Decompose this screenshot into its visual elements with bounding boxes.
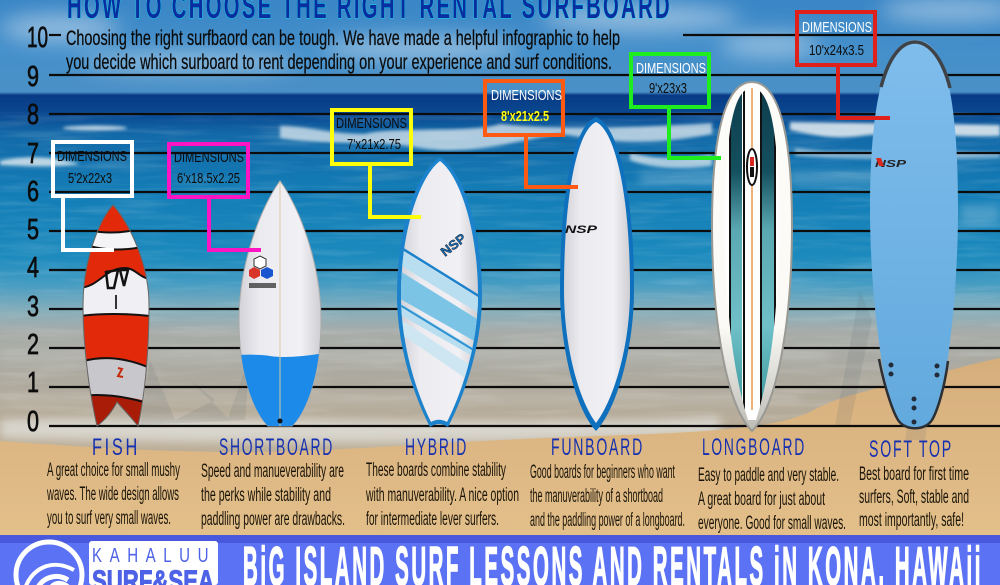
panel: hybrid description: These boards combine stability [366,460,506,481]
panel: hybrid description: with manuverability. A nice option [365,485,519,506]
panel: longboard description [698,434,846,534]
board: longboard [712,82,792,431]
callout: hybrid dimensions [332,110,421,217]
panel: funboard description: FUNBOARD [551,434,644,461]
sand [0,358,1000,535]
panel: shortboard description: the perks while stability and [201,485,331,506]
board: funboard: NSP [565,224,598,236]
scale numbers: 8 [27,99,39,131]
callout: shortboard dimensions: 6'x18.5x2.25 [177,170,240,187]
scale numbers: 0 [27,406,39,438]
panel: shortboard description: Speed and manueverability are [201,461,344,482]
text: and the paddling power of a longboard. [530,510,685,531]
board: hybrid [397,157,482,427]
clouds [0,0,1000,72]
intro text: you decide which surboard to rent depending on your experience and surf conditions. [66,51,612,74]
panel: funboard description [530,434,685,531]
callout: shortboard dimensions: DIMENSIONS [174,149,244,166]
callout: funboard dimensions: DIMENSIONS [491,87,562,104]
callout: longboard dimensions [631,54,721,158]
callout: fish dimensions: DIMENSIONS [57,148,127,165]
callout: funboard dimensions [485,81,578,187]
panel: fish description: A great choice for small mushy [47,460,180,481]
text: Good boards for beginners who want [530,462,675,483]
scale numbers: 1 [27,367,39,399]
shore foam [0,352,830,443]
panel: fish description: you to surf very small waves. [47,508,171,529]
scale numbers: 4 [27,252,39,284]
panel: longboard description: Easy to paddle and very stable. [698,465,839,486]
board: funboard [560,117,634,431]
callout: longboard dimensions: DIMENSIONS [636,60,706,77]
intro text [66,27,620,74]
panel: shortboard description: SHORTBOARD [219,434,334,461]
scale numbers: 3 [27,291,39,323]
scale numbers [27,22,48,438]
board: hybrid: NSP [438,230,469,259]
logo badge [89,541,218,585]
intro text: Choosing the right surfbaord can be tough. We have made a helpful infographic to help [66,27,620,50]
callout: soft top dimensions: 10'x24x3.5 [809,42,864,59]
panel: soft top description [859,436,969,531]
callout: funboard dimensions: 8'x21x2.5 [501,108,549,125]
panel: hybrid description: for intermediate lever surfers. [366,509,499,530]
panel: funboard description: the manuverability of a shortboad [530,486,663,507]
scale numbers: 2 [27,329,39,361]
board: shortboard [235,181,325,430]
panel: hybrid description: HYBRID [405,434,468,461]
callout: fish dimensions: 5'2x22x3 [68,170,112,187]
scale numbers: 7 [27,138,39,170]
logo badge: KAHALUU [92,545,216,567]
callout: hybrid dimensions: 7'x21x2.75 [347,136,401,153]
waves [0,122,1000,168]
palm shadows [140,290,950,440]
panel: fish description: FISH [92,434,140,461]
panel: fish description [46,434,180,529]
water texture [0,112,1000,432]
callout: soft top dimensions: DIMENSIONS [802,19,872,36]
icon: wave logo [16,542,82,585]
callout: longboard dimensions: 9'x23x3 [649,80,687,97]
scale numbers: 9 [27,61,39,93]
height scale lines [49,35,1000,426]
callout: soft top dimensions [797,12,890,118]
callout: shortboard dimensions [169,144,261,250]
panel: longboard description: everyone. Good for small waves. [698,513,846,534]
scale numbers: 6 [27,176,39,208]
board: soft top: NSP [875,159,906,170]
board: fish [80,200,152,430]
panel: shortboard description [201,434,345,530]
scale numbers: 5 [27,214,39,246]
callout: hybrid dimensions: DIMENSIONS [336,115,407,132]
panel: fish description: waves. The wide design allows [46,484,179,505]
board: soft top [870,40,958,428]
scale numbers: 10 [27,22,48,54]
footer banner [0,535,1000,585]
panel: hybrid description [365,434,519,530]
panel: shortboard description: paddling power are drawbacks. [201,509,345,530]
panel: longboard description: A great board for just about [698,489,825,510]
callout: fish dimensions [53,142,132,250]
panel: longboard description: LONGBOARD [702,434,806,461]
